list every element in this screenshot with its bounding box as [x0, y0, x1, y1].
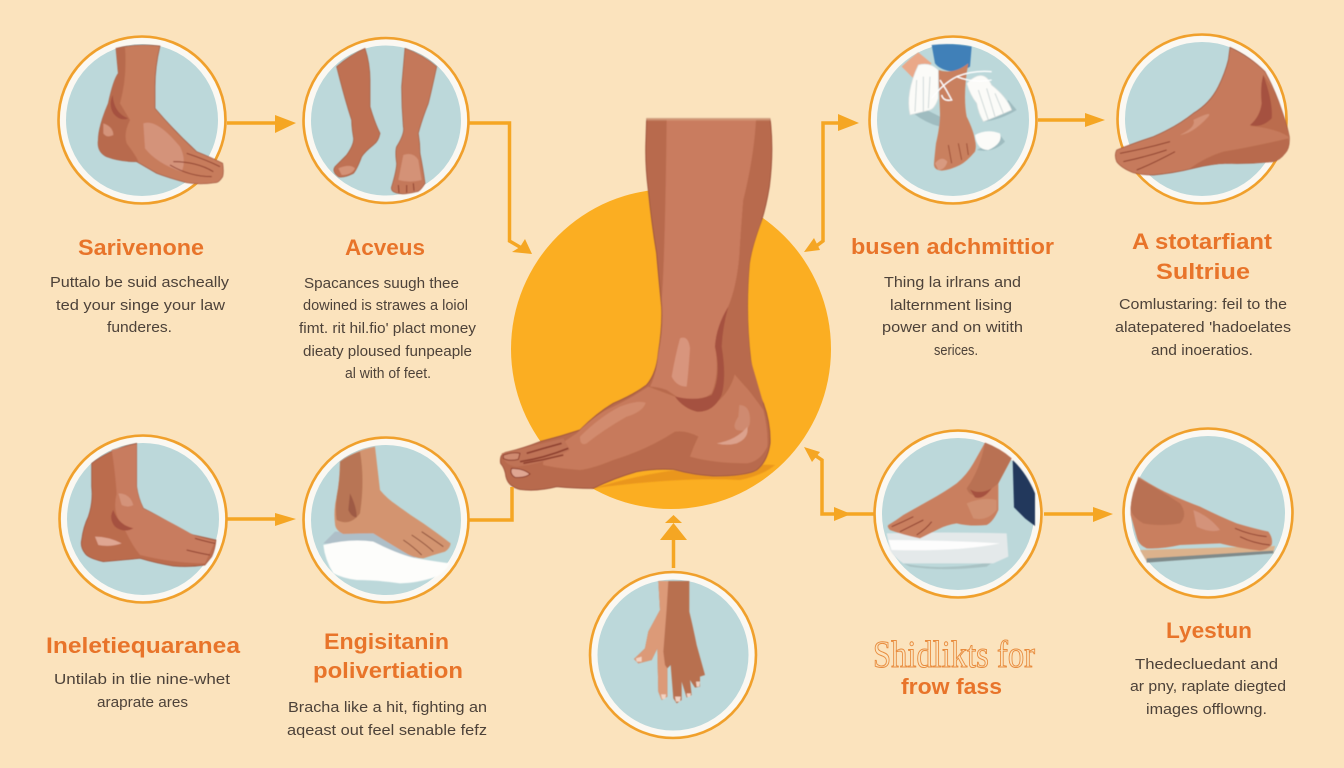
arrow: step 2 to centre [469, 123, 532, 254]
heading: Shidlikts for [873, 634, 1035, 676]
icon: bandaged foot in circle [870, 36, 1036, 204]
icon: foot on white pillow [304, 438, 468, 602]
icon: foot on wooden board [1124, 428, 1292, 598]
body text: lalternment lising [890, 297, 1012, 314]
heading [313, 629, 463, 683]
body text: alatepatered 'hadoelates [1115, 319, 1291, 336]
body text [50, 274, 230, 336]
heading: Lyestun [1166, 618, 1252, 643]
body text: ar pny, raplate diegted [1130, 678, 1286, 695]
body text: and inoeratios. [1151, 342, 1253, 359]
body text: dieaty ploused funpeaple [303, 343, 472, 360]
arrow: centre to step 8 [804, 447, 874, 521]
icon: foot above white cushion [874, 430, 1042, 598]
main leg and foot [500, 116, 775, 490]
panel: step 5 [46, 436, 241, 711]
arrow: step 5 to step 6 [227, 513, 296, 526]
heading: Sultriue [1156, 259, 1250, 284]
body text: Thing la irlrans and [884, 274, 1021, 291]
panel: step 6 [287, 438, 487, 739]
body text: aqeast out feel senable fefz [287, 722, 487, 739]
body text [299, 275, 477, 382]
heading [873, 634, 1035, 699]
body text: Bracha like a hit, fighting an [288, 699, 487, 716]
heading: Ineletiequaranea [46, 633, 241, 658]
heading: polivertiation [313, 658, 463, 683]
heading: frow fass [901, 674, 1002, 699]
panel: step 4 [1115, 34, 1291, 359]
arrow: step 1 to step 2 [227, 115, 296, 133]
central illustration: sun circle and foot [500, 116, 831, 509]
panel: step 2 [299, 38, 477, 382]
arrow: centre to step 3 [804, 114, 859, 252]
body text: ted your singe your law [56, 297, 225, 314]
icon: hand in circle [590, 572, 756, 738]
panel: step 9 [1124, 428, 1292, 718]
body text: fimt. rit hil.fio' plact money [299, 320, 477, 337]
arrow: step 3 to step 4 [1038, 113, 1105, 127]
panel: hand step [590, 572, 756, 738]
icon: foot in circle, toes right [58, 36, 226, 204]
heading: Acveus [345, 235, 425, 260]
heading: busen adchmittior [851, 234, 1054, 259]
icon: two standing feet in circle [304, 38, 468, 203]
body text: funderes. [107, 319, 172, 336]
arrow: step 8 to step 9 [1044, 507, 1113, 522]
heading: Engisitanin [324, 629, 449, 654]
body text: dowined is strawes a loiol [303, 297, 468, 314]
body text: Comlustaring: feil to the [1119, 296, 1287, 313]
panel: step 8 [873, 430, 1042, 699]
heading: Sarivenone [78, 235, 204, 260]
body text: images offlowng. [1146, 701, 1267, 718]
icon: side view foot in circle [60, 436, 226, 602]
icon: foot in circle, toes left [1115, 34, 1289, 204]
body text: al with of feet. [345, 365, 431, 382]
orange sun circle [511, 189, 831, 509]
body text [54, 671, 231, 711]
body text: Thedecluedant and [1135, 656, 1278, 673]
body text [882, 274, 1023, 359]
arrow: hand step to centre [660, 515, 687, 568]
panel: step 3 [851, 36, 1054, 359]
body text: Spacances suugh thee [304, 275, 459, 292]
body text: power and on witith [882, 319, 1023, 336]
arrow: step 6 to centre [469, 487, 512, 520]
panel: step 1 [50, 36, 230, 336]
heading: A stotarfiant [1132, 229, 1273, 254]
heading [1132, 229, 1273, 284]
body text [287, 699, 487, 739]
body text [1130, 656, 1286, 718]
body text: Puttalo be suid ascheally [50, 274, 230, 291]
body text: araprate ares [97, 694, 188, 711]
body text [1115, 296, 1291, 359]
body text: Untilab in tlie nine-whet [54, 671, 231, 688]
body text: serices. [934, 342, 978, 359]
